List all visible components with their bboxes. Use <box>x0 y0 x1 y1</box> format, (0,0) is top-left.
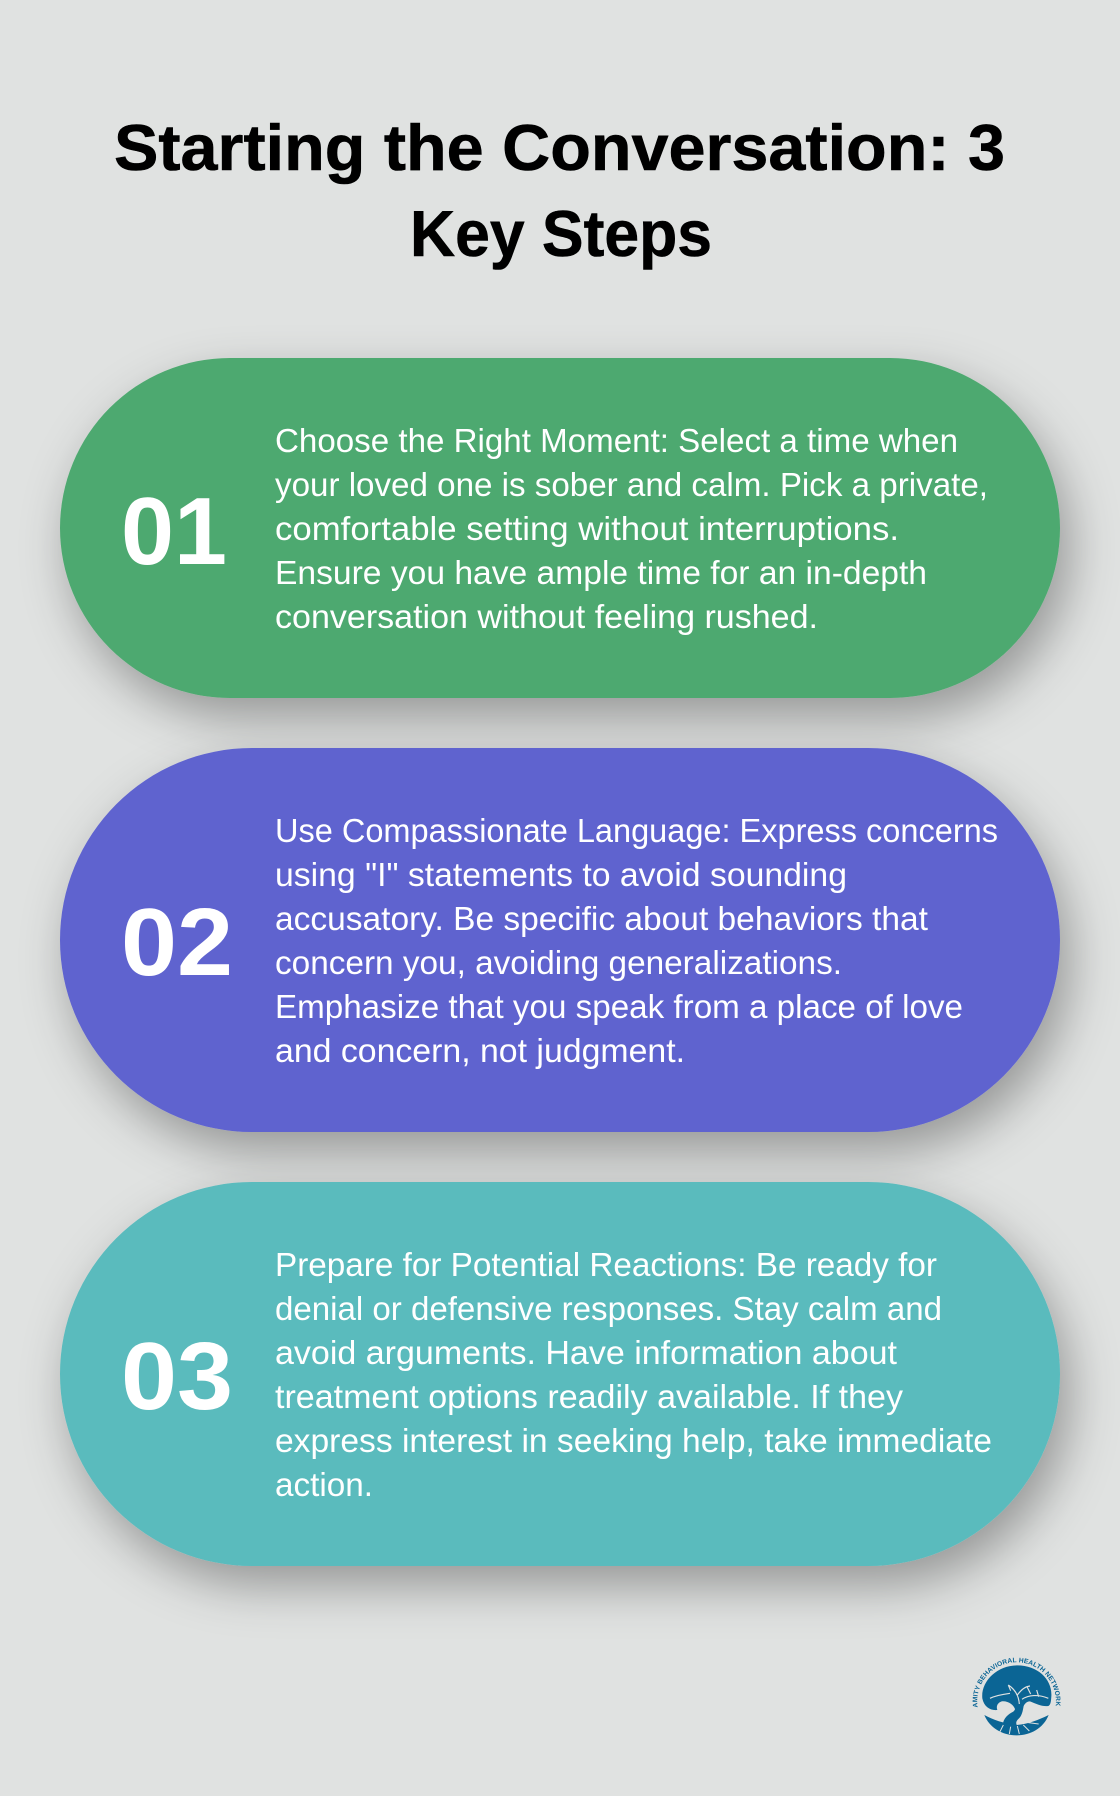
step 02 text: accusatory. Be specific about behaviors that <box>275 900 928 937</box>
pill background purple <box>60 748 1060 1132</box>
step 03 text: avoid arguments. Have information about <box>275 1334 897 1371</box>
panel: step 02 <box>60 748 1060 1132</box>
step 02 text: using "I" statements to avoid sounding <box>275 856 847 893</box>
logo tree trunk <box>1003 1704 1024 1727</box>
logo tree canopy <box>982 1665 1051 1710</box>
pill background teal <box>60 1182 1060 1566</box>
step number 03: 03 <box>121 1323 233 1430</box>
step 01 text: Choose the Right Moment: Select a time when <box>275 422 958 459</box>
step 01 text: Ensure you have ample time for an in-depth <box>275 554 927 591</box>
step 02 text: Use Compassionate Language: Express concerns <box>275 812 998 849</box>
step 03 text: treatment options readily available. If they <box>275 1378 904 1415</box>
icon: Amity Behavioral Health Network logo <box>972 1658 1061 1736</box>
step number 01: 01 <box>121 478 227 585</box>
step 03 text: express interest in seeking help, take immediate <box>275 1422 992 1459</box>
logo root cuts <box>1000 1723 1039 1734</box>
title <box>114 111 1005 270</box>
step 01 text: your loved one is sober and calm. Pick a private, <box>275 466 988 503</box>
step 02 text: Emphasize that you speak from a place of love <box>275 988 963 1025</box>
step 03 text <box>275 1246 992 1503</box>
step 02 text: concern you, avoiding generalizations. <box>275 944 842 981</box>
step 02 text: and concern, not judgment. <box>275 1032 685 1069</box>
step 02 text <box>275 812 998 1069</box>
step 03 text: action. <box>275 1466 373 1503</box>
step 03 text: Prepare for Potential Reactions: Be ready for <box>275 1246 937 1283</box>
step 01 text <box>275 422 988 635</box>
pill background green <box>60 358 1060 698</box>
step 01 text: conversation without feeling rushed. <box>275 598 818 635</box>
logo tree branches <box>990 1685 1048 1704</box>
title: Starting the Conversation: 3 <box>114 111 1005 184</box>
panel: step 01 <box>60 358 1060 698</box>
title: Key Steps <box>410 197 712 270</box>
step 01 text: comfortable setting without interruptions. <box>275 510 899 547</box>
step 03 text: denial or defensive responses. Stay calm and <box>275 1290 942 1327</box>
step number 02: 02 <box>121 889 233 996</box>
logo ring text: AMITY BEHAVIORAL HEALTH NETWORK <box>972 1658 1061 1708</box>
logo roots crescent <box>984 1715 1049 1735</box>
panel: step 03 <box>60 1182 1060 1566</box>
